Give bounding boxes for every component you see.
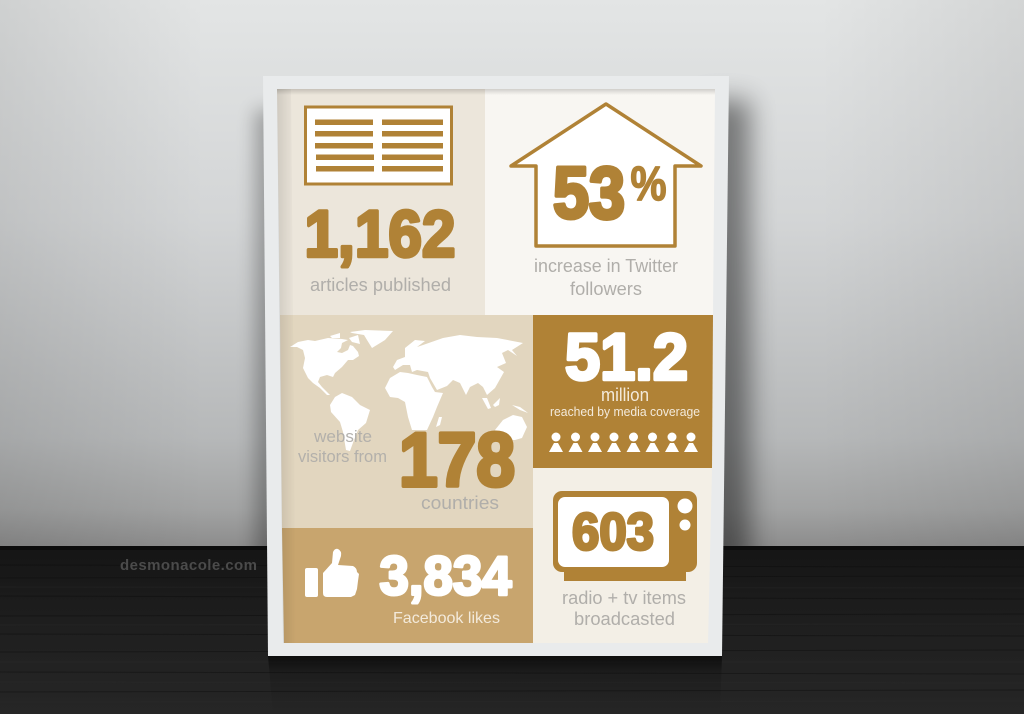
label: twitter: followers — [570, 279, 642, 299]
floor — [0, 546, 1024, 714]
icon: thumbs up — [305, 549, 359, 597]
label: articles: articles published — [310, 275, 451, 295]
number: countries: 178 — [399, 418, 515, 503]
number: media reach: 51.2 — [565, 320, 688, 394]
world map — [290, 330, 528, 451]
panel: world visitors — [280, 315, 533, 528]
label: countries: countries — [421, 493, 499, 513]
frame reflection — [268, 656, 722, 714]
label: twitter — [534, 256, 678, 299]
label: twitter: increase in Twitter — [534, 256, 678, 276]
panel: broadcast — [533, 468, 712, 643]
panel: media reach — [533, 315, 713, 468]
label: broadcast — [562, 588, 686, 629]
poster — [277, 89, 715, 643]
poster frame — [263, 76, 729, 656]
icon: row of people — [549, 432, 698, 452]
label: website visitors from: website — [313, 427, 372, 446]
label: website visitors from — [298, 427, 387, 466]
number: facebook: 3,834 — [380, 544, 512, 606]
panel: facebook — [282, 528, 533, 643]
icon: house — [511, 104, 701, 246]
label: broadcast: broadcasted — [574, 609, 675, 629]
number: articles: 1,162 — [304, 198, 456, 270]
icon: television — [553, 491, 697, 581]
label: million: million — [601, 385, 649, 405]
wall background — [0, 0, 1024, 547]
label: facebook: Facebook likes — [393, 610, 500, 627]
icon: newspaper — [306, 107, 452, 184]
panel: twitter — [485, 89, 715, 315]
number: twitter: 53 — [553, 153, 625, 234]
panel: articles — [277, 89, 485, 315]
number: twitter: % — [630, 158, 666, 211]
label: broadcast: radio + tv items — [562, 588, 686, 608]
number: broadcast: 603 — [572, 504, 654, 562]
inner frame shadow — [277, 89, 715, 643]
frame shadow — [255, 100, 750, 570]
watermark: desmonacole.com — [120, 557, 257, 574]
label: website visitors from: visitors from — [298, 447, 387, 466]
label: reached by media coverage: reached by media coverage — [550, 405, 700, 419]
